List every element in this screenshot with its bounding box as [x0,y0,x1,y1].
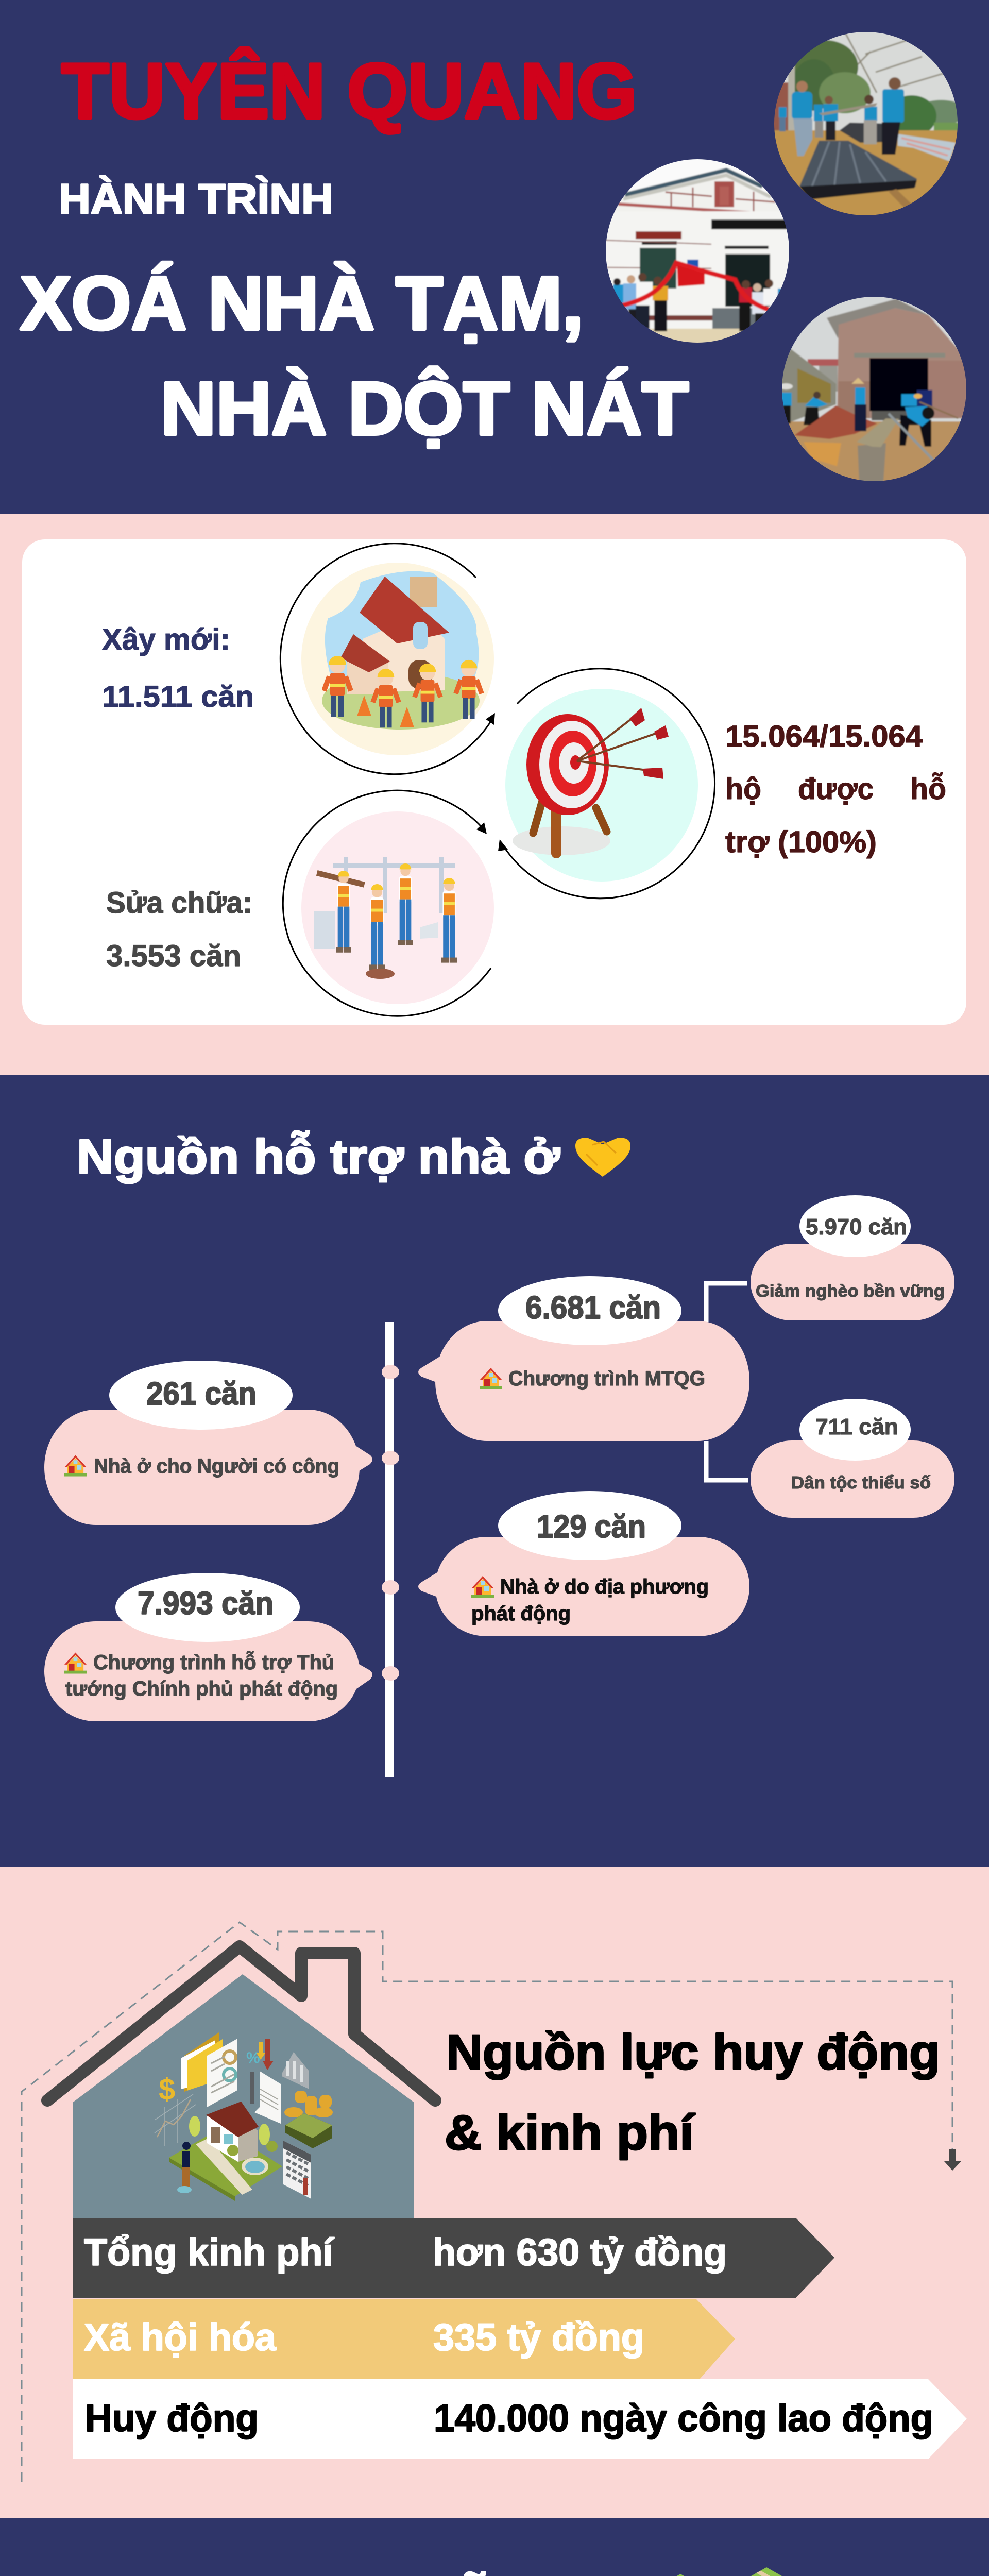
heading line 2: NHÀ DỘT NÁT [161,366,689,450]
arrow: down [944,2149,961,2171]
label: repairs: 3.553 căn [106,939,241,973]
title: Tuyên Quang: TUYÊN QUANG [61,47,637,135]
oval: count [498,1491,681,1560]
icon: house [471,1576,494,1598]
white card [22,539,966,1025]
card text: phát động [471,1602,571,1625]
label: new builds: 11.511 căn [102,680,254,714]
panel: resources and funding [22,1922,967,2482]
label: households supported [725,720,946,859]
label: households supported: được [798,772,874,806]
heading: Nguồn lực huy động [446,2025,940,2080]
card: Chương trình MTQG [418,1276,749,1441]
connectors [706,1283,748,1480]
label: repairs: Sửa chữa: [106,886,252,920]
count text: 5.970 căn [806,1214,907,1240]
house roof [47,1946,435,2100]
label: new builds [102,623,254,714]
illustration: target [505,689,698,882]
bar: socialised funding [73,2299,735,2379]
oval: count [799,1195,911,1257]
card: Chương trình hỗ trợ Thủ tướng [44,1573,372,1721]
illustration: repair workers [301,811,494,1004]
bar label: Huy động [85,2397,259,2439]
count text: 711 căn [815,1414,898,1439]
panel: housing support sources [44,1129,954,1777]
bar: labour mobilised [73,2379,967,2459]
label: households supported: hỗ [910,772,946,806]
card text: Nhà ở do địa phương [500,1575,709,1598]
count text: 261 căn [146,1376,257,1412]
oval: count [115,1573,300,1642]
timeline axis [382,1322,399,1777]
label: households supported: 15.064/15.064 [725,720,923,753]
count text: 6.681 căn [525,1290,661,1326]
label: repairs [106,886,252,973]
card text [471,1575,709,1625]
illustration: new house [301,563,494,755]
arrow: new house ring [280,544,495,774]
panel: header [20,28,968,486]
photo: workers with roofing sheets [774,32,958,215]
arrow: target ring [498,669,715,899]
panel: support levels [59,2567,967,2576]
bar value: hơn 630 tỷ đồng [433,2231,727,2274]
count text: 7.993 căn [138,1586,274,1621]
oval: count [498,1276,681,1345]
card: Nhà ở cho Người có công [44,1361,372,1525]
heading: Nguồn hỗ trợ nhà ở [77,1129,560,1183]
arrow: repair ring [283,790,491,1016]
bar value: 140.000 ngày công lao động [434,2397,933,2439]
card text: Chương trình MTQG [508,1367,705,1390]
panel: housing summary [22,539,966,1025]
icon: handshake [575,1138,630,1177]
oval: count [799,1399,911,1461]
card: Giảm nghèo bền vững [751,1195,954,1320]
card: Dân tộc thiểu số [751,1399,954,1518]
count text: 129 căn [537,1509,646,1545]
label: households supported: hộ [725,772,761,806]
icon: house [64,1455,87,1477]
card: Nhà ở do địa phương phát động [418,1491,749,1636]
dashed outline [22,1922,952,2482]
bar label: Xã hội hóa [84,2316,277,2359]
card text [65,1650,338,1700]
icon: house [64,1652,87,1674]
bar label: Tổng kinh phí [84,2231,334,2274]
heading line 1: XOÁ NHÀ TẠM, [20,261,584,346]
photo: brick house repair [778,295,968,486]
bar: total funding [73,2218,834,2298]
photo: house inauguration ribbon [603,157,793,345]
illustration: finance and house: $ [159,2073,175,2106]
heading: & kinh phí [445,2105,695,2160]
icon: house [480,1368,502,1389]
heading [445,2025,940,2160]
card text: tướng Chính phủ phát động [65,1677,338,1700]
card text: Chương trình hỗ trợ Thủ [93,1650,334,1674]
subtitle: Hành trình: HÀNH TRÌNH [59,176,333,223]
bar value: 335 tỷ đồng [433,2316,644,2359]
icon: money stacks [653,2567,788,2576]
illustration: finance and house [155,2032,333,2201]
house body [73,1974,414,2221]
illustration: finance and house: % [246,2049,260,2066]
label: new builds: Xây mới: [102,623,230,656]
card text: Giảm nghèo bền vững [756,1281,945,1300]
card text: Dân tộc thiểu số [791,1473,931,1492]
label: households supported: trợ (100%) [725,825,877,859]
oval: count [109,1361,293,1430]
card text: Nhà ở cho Người có công [94,1455,339,1478]
